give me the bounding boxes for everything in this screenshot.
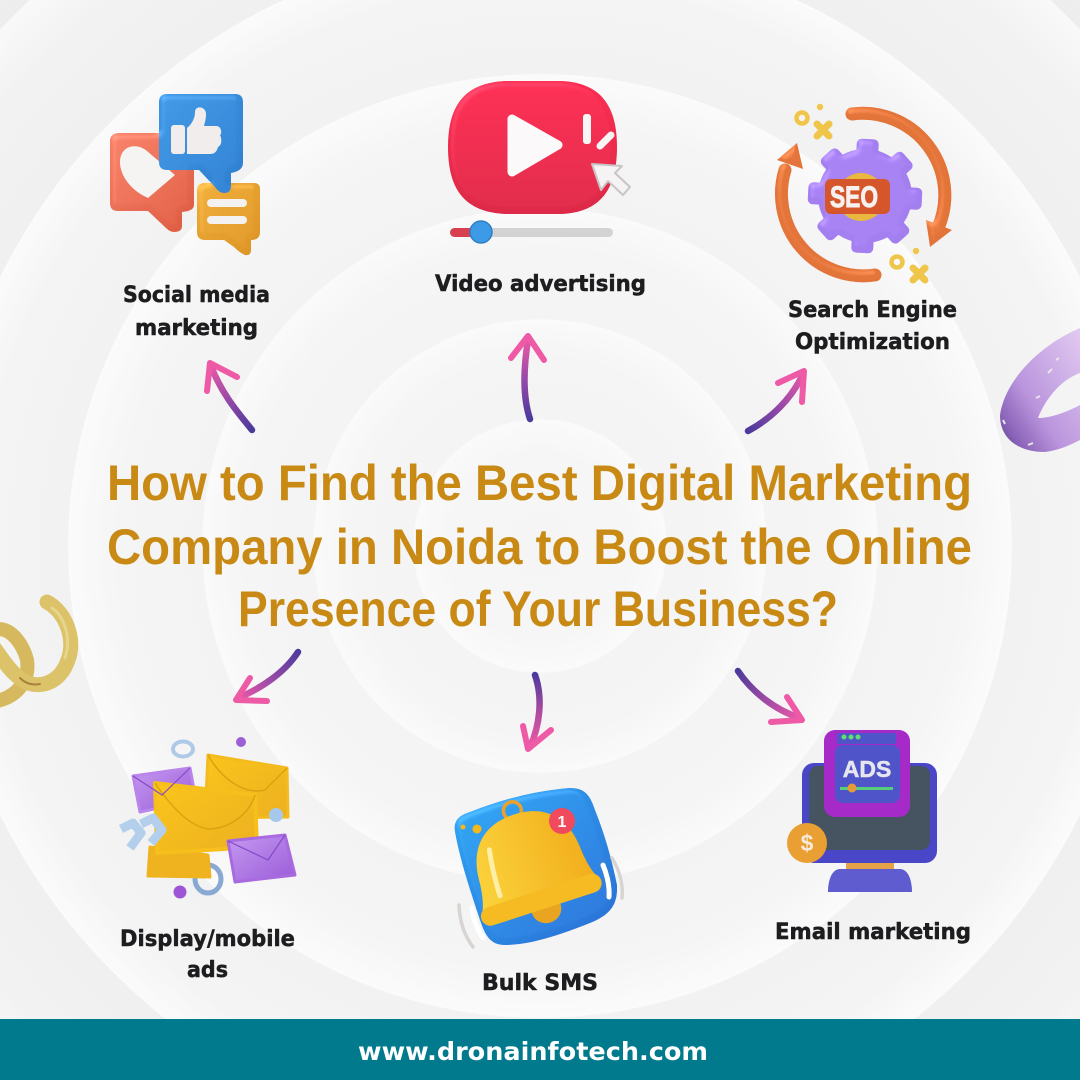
icon: notification bell: [450, 783, 622, 947]
icon: SEO gear with arrows: [777, 104, 952, 280]
label: Email marketing: Email marketing: [775, 920, 971, 945]
icon: video play button: [448, 81, 630, 243]
decoration: purple torus: [1000, 328, 1080, 452]
main title: Presence of Your Business?: [238, 581, 838, 637]
icon: ads monitor: ADS: [843, 756, 891, 782]
icon: SEO gear with arrows: SEO: [830, 181, 878, 214]
arrow to social media: [207, 363, 252, 430]
main title: Company in Noida to Boost the Online: [107, 519, 972, 575]
label: Display/mobile ads: [120, 927, 295, 983]
footer bar: [0, 1019, 1080, 1080]
icon: notification bell: 1: [558, 814, 567, 831]
arrow to display ads: [236, 652, 298, 701]
icon: ads monitor: [787, 730, 937, 892]
decoration: gold spring: [0, 602, 71, 702]
arrow to bulk SMS: [523, 675, 551, 749]
label: Bulk SMS: Bulk SMS: [482, 971, 598, 996]
icon: social media bubbles: [110, 94, 260, 255]
arrow to email marketing: [738, 671, 802, 722]
label: Display/mobile ads: ads: [187, 958, 228, 983]
main title: How to Find the Best Digital Marketing: [107, 455, 972, 511]
label: Social media marketing: [123, 283, 270, 341]
icon: envelopes: [121, 737, 295, 898]
label: Display/mobile ads: Display/mobile: [120, 927, 295, 952]
label: Social media marketing: Social media: [123, 283, 270, 308]
footer bar: www.dronainfotech.com: [358, 1037, 708, 1066]
main title: [107, 455, 972, 637]
label: Video advertising: Video advertising: [435, 272, 646, 297]
label: Social media marketing: marketing: [135, 316, 258, 341]
label: Search Engine Optimization: Optimization: [795, 330, 950, 355]
label: Search Engine Optimization: [788, 298, 957, 355]
icon: ads monitor: $: [801, 830, 814, 856]
arrow to SEO: [748, 371, 804, 431]
arrow to video: [511, 336, 544, 419]
label: Search Engine Optimization: Search Engine: [788, 298, 957, 323]
